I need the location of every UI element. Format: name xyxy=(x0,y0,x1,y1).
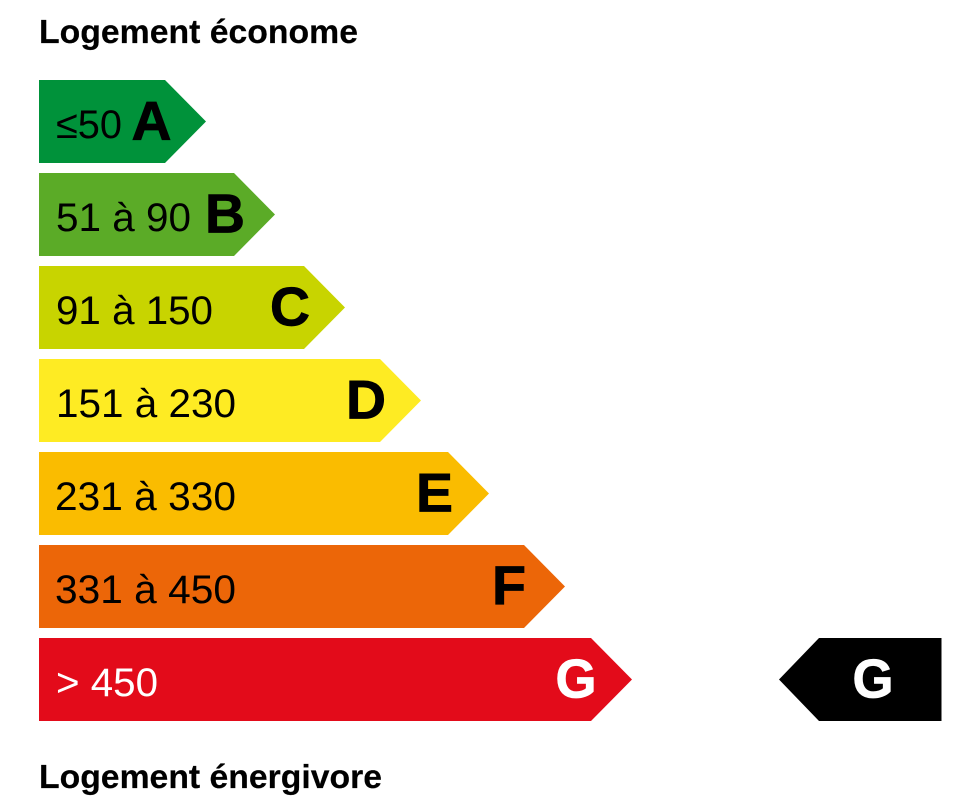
heading: Logement énergivore: Logement énergivore xyxy=(39,759,382,796)
band B: B xyxy=(205,182,245,244)
band C: 91 à 150 xyxy=(56,289,213,333)
rating marker: G: G xyxy=(852,648,894,710)
band D xyxy=(39,359,421,442)
rating marker: G xyxy=(779,638,942,721)
heading: Logement économe: Logement économe xyxy=(39,14,358,51)
band C: C xyxy=(270,276,310,338)
band F: F xyxy=(492,554,526,616)
band A xyxy=(39,80,206,163)
band E: E xyxy=(416,462,453,524)
band C xyxy=(39,266,345,349)
band B: 51 à 90 xyxy=(56,196,191,240)
band A: A xyxy=(132,90,172,152)
band G: G xyxy=(556,648,596,710)
band E: 231 à 330 xyxy=(55,475,236,519)
band D: D xyxy=(346,368,386,430)
band G: > 450 xyxy=(56,661,158,705)
band A: ≤50 xyxy=(56,103,122,147)
band F: 331 à 450 xyxy=(55,568,236,612)
band D: 151 à 230 xyxy=(56,382,236,426)
band B xyxy=(39,173,275,256)
band G xyxy=(39,638,632,721)
band E xyxy=(39,452,489,535)
band F xyxy=(39,545,565,628)
